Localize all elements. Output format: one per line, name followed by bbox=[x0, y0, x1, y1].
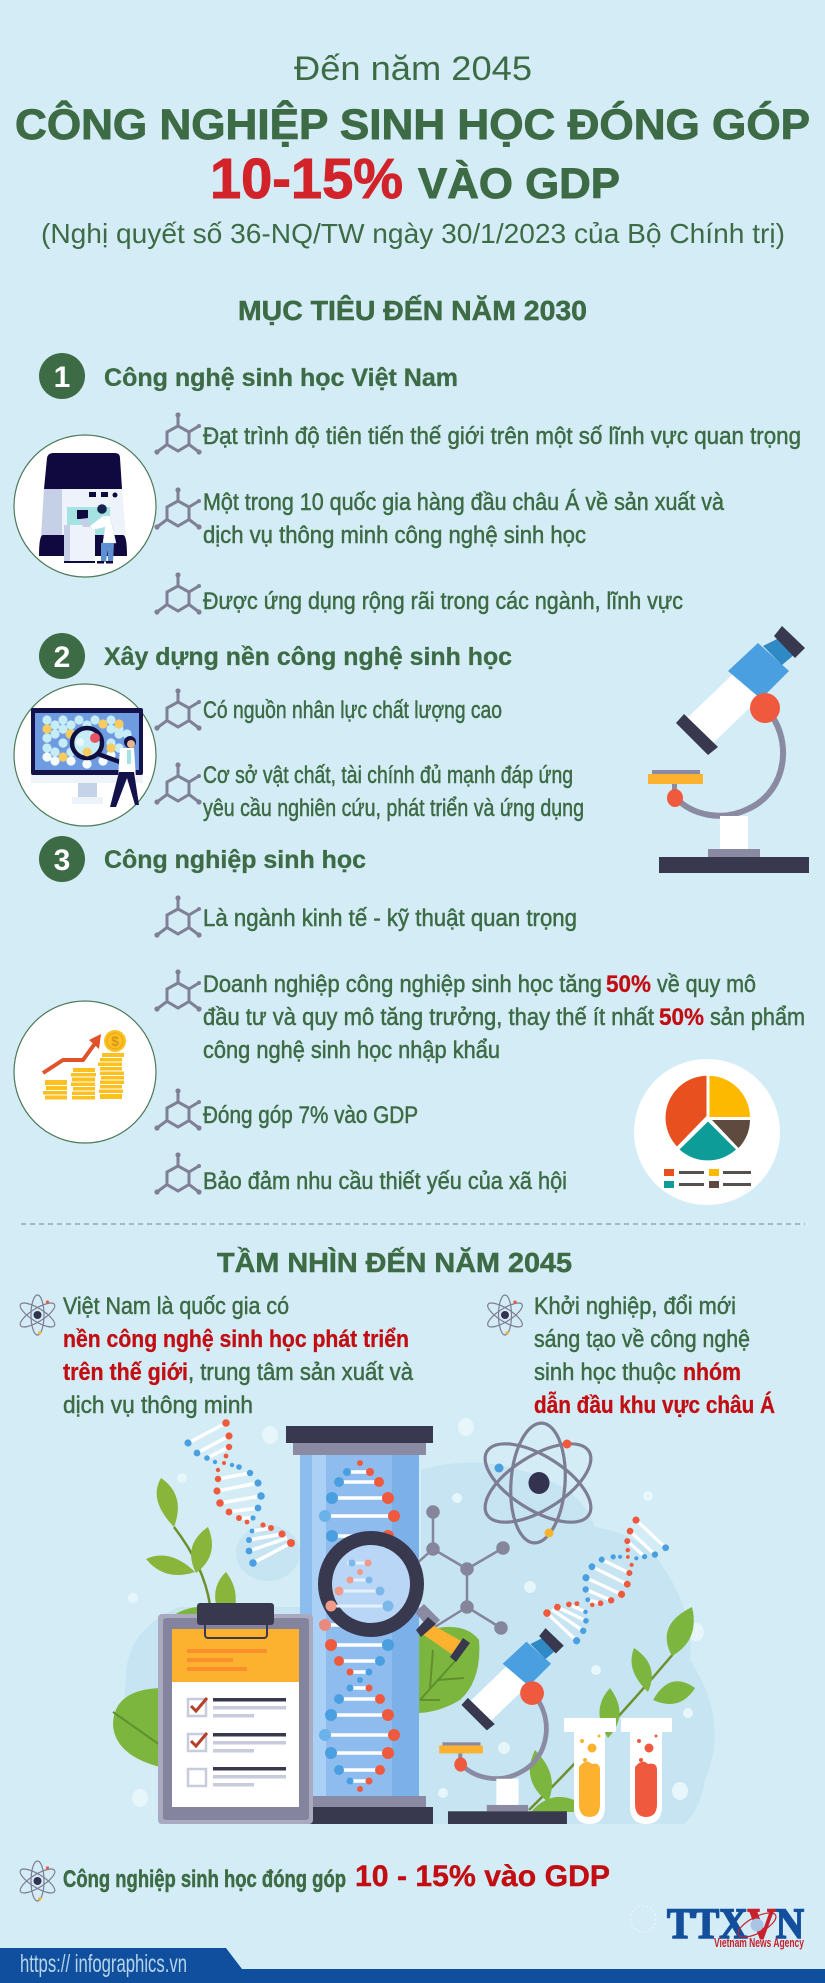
icon: growth coins in circle: $ bbox=[111, 1033, 119, 1049]
number badge 1 bbox=[39, 353, 85, 399]
icon: molecule bbox=[154, 487, 202, 530]
test tube red bbox=[621, 1718, 672, 1824]
text: Được ứng dụng rộng rãi trong các ngành, lĩnh vực bbox=[203, 588, 683, 615]
bullet 2.2 bbox=[154, 762, 584, 822]
text line 1: Cơ sở vật chất, tài chính đủ mạnh đáp ứng bbox=[203, 762, 573, 789]
title block bbox=[15, 50, 810, 249]
icon: molecule bbox=[154, 1088, 202, 1131]
tube column bbox=[286, 1426, 433, 1824]
icon: atom bbox=[485, 1295, 525, 1335]
molecule structure bbox=[415, 1506, 508, 1634]
conclusion text: Công nghiệp sinh học đóng góp bbox=[63, 1866, 346, 1893]
icon: pie chart in circle bbox=[634, 1059, 780, 1205]
dna inside tube bbox=[319, 1460, 400, 1792]
icon: researcher at monitor in circle bbox=[14, 684, 156, 826]
bullet 1.1 bbox=[154, 412, 801, 455]
section 2 header bbox=[39, 633, 512, 679]
text line 3: công nghệ sinh học nhập khẩu bbox=[203, 1037, 500, 1064]
bullet 1.2 bbox=[154, 487, 724, 549]
text line 1: 50% bbox=[606, 971, 651, 998]
text: Đóng góp 7% vào GDP bbox=[203, 1102, 418, 1129]
bullet 2.1 bbox=[154, 688, 502, 731]
bullet 3.1 bbox=[154, 895, 577, 938]
icon: molecule bbox=[154, 762, 202, 805]
dna left bbox=[184, 1419, 295, 1567]
section 1 title: Công nghệ sinh học Việt Nam bbox=[104, 364, 458, 392]
bubbles bbox=[128, 1418, 704, 1807]
bullet 3.4 bbox=[154, 1152, 567, 1195]
bullet 1.3 bbox=[154, 572, 683, 615]
number badge 3: 3 bbox=[54, 844, 70, 877]
icon: atom bbox=[17, 1295, 58, 1335]
heading: goals to 2030: MỤC TIÊU ĐẾN NĂM 2030 bbox=[238, 295, 587, 326]
text line 2: 50% bbox=[659, 1004, 704, 1031]
conclusion figure: 10 - 15% vào GDP bbox=[355, 1860, 610, 1893]
clipboard bbox=[158, 1603, 313, 1824]
title: highlighted percentage: 10-15% bbox=[210, 147, 403, 211]
bullet 3.3 bbox=[154, 1088, 418, 1131]
plant right bbox=[529, 1607, 695, 1812]
icon: molecule bbox=[154, 688, 202, 731]
number badge 3 bbox=[39, 836, 85, 882]
number badge 2 bbox=[39, 633, 85, 679]
text line 2: sáng tạo về công nghệ bbox=[534, 1326, 750, 1353]
text line 1: Một trong 10 quốc gia hàng đầu châu Á về sản xuất và bbox=[203, 489, 724, 516]
title: into GDP: VÀO GDP bbox=[418, 160, 620, 208]
icon: lab machine in circle bbox=[14, 435, 156, 577]
conclusion line bbox=[17, 1860, 610, 1901]
heading: vision to 2045: TẦM NHÌN ĐẾN NĂM 2045 bbox=[217, 1247, 572, 1278]
vision point left bbox=[17, 1293, 413, 1419]
logo: TTXVN: TTXVN bbox=[667, 1901, 804, 1948]
leaves behind clipboard and tube bbox=[113, 1607, 479, 1767]
section 3 header bbox=[39, 836, 366, 882]
text line 1: Việt Nam là quốc gia có bbox=[63, 1293, 289, 1320]
icon: growth coins in circle bbox=[14, 1001, 156, 1143]
text line 3: trên thế giới bbox=[63, 1359, 188, 1386]
icon: molecule bbox=[154, 1152, 202, 1195]
section 1 header bbox=[39, 353, 458, 399]
footer bar bbox=[0, 1948, 825, 1983]
background blobs bbox=[125, 1462, 715, 1824]
text: Là ngành kinh tế - kỹ thuật quan trọng bbox=[203, 905, 577, 932]
text: Có nguồn nhân lực chất lượng cao bbox=[203, 697, 502, 724]
text line 2: dịch vụ thông minh công nghệ sinh học bbox=[203, 522, 586, 549]
vision point right bbox=[485, 1293, 775, 1419]
atom large bbox=[473, 1421, 603, 1545]
illustration: microscope bbox=[648, 626, 809, 873]
dna right bbox=[537, 1499, 675, 1661]
icon: molecule bbox=[154, 572, 202, 615]
text line 2 highlighted: nền công nghệ sinh học phát triển bbox=[63, 1326, 409, 1353]
icon: molecule bbox=[154, 412, 202, 455]
subtitle: resolution reference: (Nghị quyết số 36-NQ/TW ngày 30/1/2023 của Bộ Chính trị) bbox=[41, 218, 785, 249]
number badge 2: 2 bbox=[54, 641, 70, 674]
text line 3: , trung tâm sản xuất và bbox=[188, 1359, 413, 1386]
illustration: biotech lab scene bbox=[113, 1418, 715, 1824]
text line 2: đầu tư và quy mô tăng trưởng, thay thế ít nhất bbox=[203, 1004, 654, 1031]
text line 1: Doanh nghiệp công nghiệp sinh học tăng bbox=[203, 971, 602, 998]
number badge 1: 1 bbox=[54, 361, 70, 394]
icon: molecule bbox=[154, 895, 202, 938]
bullet 3.2 bbox=[154, 969, 805, 1064]
icon: atom bbox=[17, 1861, 58, 1901]
text line 3: nhóm bbox=[683, 1359, 741, 1386]
magnifying glass bbox=[325, 1538, 470, 1662]
icon: molecule bbox=[154, 969, 202, 1012]
microscope small bbox=[439, 1628, 567, 1824]
text line 3 bbox=[63, 1359, 413, 1386]
text line 1: Khởi nghiệp, đổi mới bbox=[534, 1293, 736, 1320]
section 2 title: Xây dựng nền công nghệ sinh học bbox=[104, 643, 512, 671]
text line 4 highlighted: dẫn đầu khu vực châu Á bbox=[534, 1391, 775, 1419]
text: Bảo đảm nhu cầu thiết yếu của xã hội bbox=[203, 1168, 567, 1195]
text line 1: về quy mô bbox=[657, 971, 756, 998]
plant left bbox=[146, 1478, 236, 1612]
title: year line: Đến năm 2045 bbox=[294, 50, 532, 88]
test tube orange bbox=[564, 1718, 616, 1824]
footer url: https:// infographics.vn bbox=[20, 1950, 187, 1978]
title: main heading: CÔNG NGHIỆP SINH HỌC ĐÓNG GÓP bbox=[15, 100, 810, 149]
text line 2: sản phẩm bbox=[710, 1004, 805, 1031]
text line 4: dịch vụ thông minh bbox=[63, 1392, 253, 1419]
section 3 title: Công nghiệp sinh học bbox=[104, 846, 366, 874]
text line 2: yêu cầu nghiên cứu, phát triển và ứng dụng bbox=[203, 795, 584, 822]
text line 3: sinh học thuộc bbox=[534, 1359, 676, 1386]
